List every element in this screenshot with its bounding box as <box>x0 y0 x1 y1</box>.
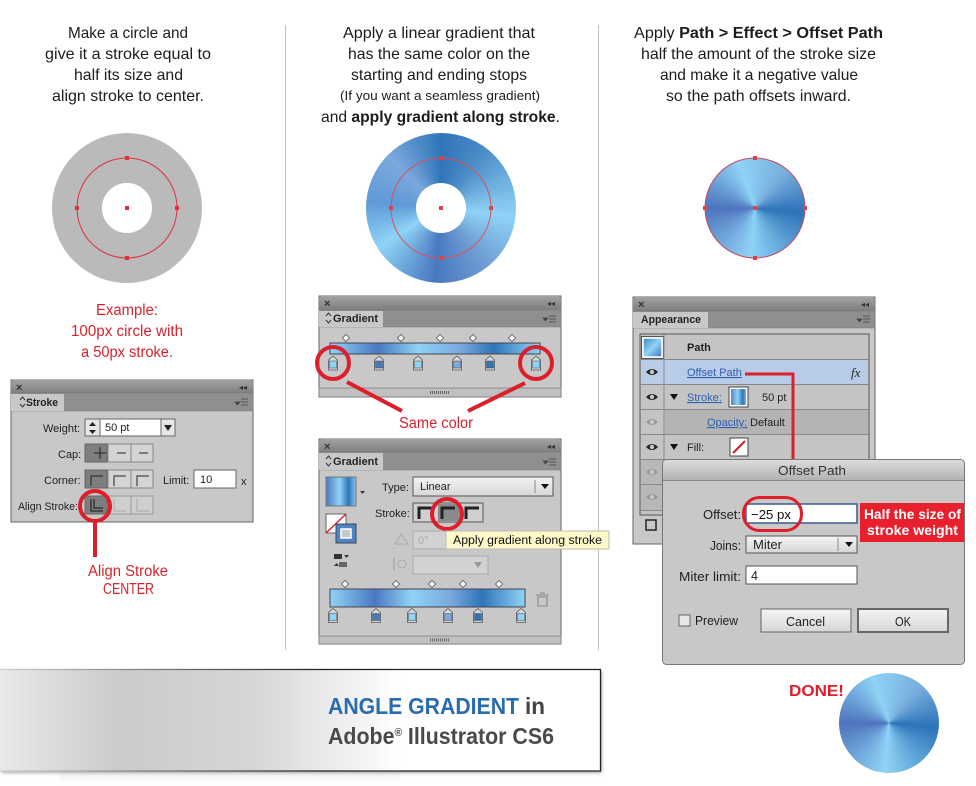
heading: step 2 instructions: starting and ending stops <box>351 67 527 84</box>
weight row: Weight: <box>43 423 80 435</box>
heading: step 3 instructions: and make it a negative value <box>660 67 858 84</box>
cap row <box>58 444 153 462</box>
gradient midpoints <box>342 580 502 588</box>
weight row: 50 pt <box>105 422 129 434</box>
panel: appearance <box>633 297 875 544</box>
banner title: Illustrator CS6 <box>402 723 554 749</box>
gradient bar <box>330 589 525 607</box>
banner title: in <box>525 693 545 719</box>
button: ok <box>858 609 948 632</box>
panel: gradient stops: × <box>324 298 330 310</box>
banner title: ® <box>394 727 402 739</box>
tab: gradient <box>319 453 383 470</box>
example caption: Example: <box>96 302 158 319</box>
offset row: −25 px <box>751 507 791 522</box>
fill and stroke icons <box>326 514 356 543</box>
tab: appearance: Appearance <box>641 314 701 326</box>
callout: align stroke circle and line <box>80 491 110 557</box>
banner title: ANGLE GRADIENT <box>328 693 519 719</box>
offset row: Offset: <box>703 508 741 522</box>
row: stroke: Stroke: <box>687 392 722 404</box>
callout label: align stroke center: CENTER <box>103 581 154 598</box>
row: stroke: 50 pt <box>762 392 786 404</box>
button: cancel <box>761 609 851 632</box>
tab: stroke: Stroke <box>26 397 58 409</box>
panel: stroke: ◂◂ <box>239 383 247 392</box>
callout: apply gradient along stroke circle <box>432 499 462 529</box>
gray stroked circle with anchor points <box>75 156 179 260</box>
callout: half the size of stroke weight: stroke weight <box>867 522 958 538</box>
banner title <box>328 693 554 749</box>
panel: gradient options: × <box>324 441 330 453</box>
panel: gradient options: ◂◂ <box>547 442 555 451</box>
tab: stroke <box>11 394 64 411</box>
heading: step 1 instructions: give it a stroke equal to <box>45 46 211 63</box>
type row: Type: <box>382 482 409 494</box>
done label: DONE! <box>789 683 844 700</box>
callout: offset path connector <box>745 374 793 498</box>
divider <box>285 25 286 650</box>
miter limit row: Miter limit: <box>679 570 741 584</box>
gradient swatch <box>326 477 356 506</box>
panel: appearance: × <box>638 299 644 311</box>
tooltip: Apply gradient along stroke <box>453 535 602 547</box>
button: ok: OK <box>895 615 912 629</box>
joins row: Miter <box>753 538 782 552</box>
callout: same color circles and lines <box>317 347 552 411</box>
weight row <box>43 419 175 436</box>
offset row <box>703 504 857 523</box>
panel: gradient stops <box>319 296 561 397</box>
callout: half the size of stroke weight <box>860 503 964 542</box>
heading: step 3 instructions: half the amount of the stroke size <box>641 46 876 63</box>
callout: offset value highlight <box>744 498 802 530</box>
heading: step 2 instructions: Apply a linear gradient that <box>343 25 536 42</box>
tab: gradient: Gradient <box>333 313 378 325</box>
callout label: same color: Same color <box>399 415 473 432</box>
heading: step 3 instructions: so the path offsets inward. <box>666 88 851 105</box>
offset path angle gradient circle <box>703 156 807 260</box>
panel: gradient stops: ◂◂ <box>547 299 555 308</box>
cap row: Cap: <box>58 449 81 461</box>
gradient stops <box>328 608 526 622</box>
align stroke row: Align Stroke: <box>18 501 78 513</box>
preview checkbox: Preview <box>695 614 739 628</box>
dialog: offset path <box>662 460 964 664</box>
panel: stroke <box>11 380 253 522</box>
finished angle gradient circle <box>839 673 939 773</box>
miter limit row: 4 <box>751 569 758 583</box>
row: path: Path <box>687 342 711 354</box>
callout label: align stroke center <box>88 563 168 598</box>
swap icon <box>334 554 349 567</box>
icon: trash <box>536 593 549 606</box>
joins row: Joins: <box>710 539 741 553</box>
rows: hidden by dialog <box>641 460 868 510</box>
dialog: offset path: Offset Path <box>778 463 846 478</box>
row: offset path <box>641 360 868 384</box>
tooltip <box>446 531 609 549</box>
type row: Linear <box>420 481 451 493</box>
panel: appearance: ◂◂ <box>861 300 869 309</box>
row: fill <box>646 438 748 456</box>
corner row: 10 <box>200 474 212 486</box>
bottom toolbar <box>646 520 656 530</box>
heading: step 3 instructions: Apply Path > Effect > Offset Path <box>634 25 883 42</box>
heading: step 3 instructions <box>634 25 883 105</box>
stroke row <box>375 503 483 522</box>
callout label: align stroke center: Align Stroke <box>88 563 168 580</box>
heading: step 2 instructions: has the same color on the <box>348 46 530 63</box>
row: stroke <box>646 387 786 407</box>
miter limit row <box>679 566 857 584</box>
panel: stroke: × <box>16 382 22 394</box>
tab: appearance <box>633 312 708 328</box>
corner row: Limit: <box>163 475 189 487</box>
stroke row: Stroke: <box>375 508 410 520</box>
heading: step 1 instructions: half its size and <box>74 67 183 84</box>
gradient bar <box>330 343 540 354</box>
callout: half the size of stroke weight: Half the size of <box>864 506 961 522</box>
heading: step 2 instructions: and apply gradient along stroke. <box>321 109 560 126</box>
row: fill: Fill: <box>687 442 704 454</box>
type row <box>382 477 553 496</box>
joins row <box>710 536 857 553</box>
corner row: Corner: <box>44 475 81 487</box>
banner <box>0 669 602 786</box>
button: cancel: Cancel <box>786 615 825 629</box>
tab: gradient <box>319 311 383 327</box>
example caption <box>71 302 183 361</box>
heading: step 2 instructions <box>321 25 560 126</box>
align stroke row <box>18 496 153 514</box>
row: offset path: Offset Path <box>687 367 742 379</box>
gradient midpoints <box>342 334 516 342</box>
banner title: Adobe <box>328 723 400 749</box>
corner row <box>44 470 247 488</box>
row: path <box>642 336 711 358</box>
heading: step 1 instructions: align stroke to center. <box>52 88 204 105</box>
corner row: x <box>241 476 247 488</box>
gradient stops <box>328 356 540 370</box>
gradient along stroke ring <box>366 133 516 283</box>
row: opacity <box>646 410 868 434</box>
row: opacity: Default <box>750 417 785 429</box>
divider <box>598 25 599 650</box>
disabled fields <box>394 531 488 574</box>
heading: step 1 instructions <box>45 25 211 105</box>
heading: step 2 instructions: (If you want a seamless gradient) <box>340 89 540 103</box>
example caption: 100px circle with <box>71 323 183 340</box>
example caption: a 50px stroke. <box>81 344 173 361</box>
heading: step 1 instructions: Make a circle and <box>68 25 188 42</box>
panel: gradient options <box>319 439 561 644</box>
row: opacity: Opacity: <box>707 417 747 429</box>
row: offset path: fx <box>851 365 861 380</box>
tab: gradient: Gradient <box>333 456 378 468</box>
disabled fields: 0° <box>418 535 429 547</box>
